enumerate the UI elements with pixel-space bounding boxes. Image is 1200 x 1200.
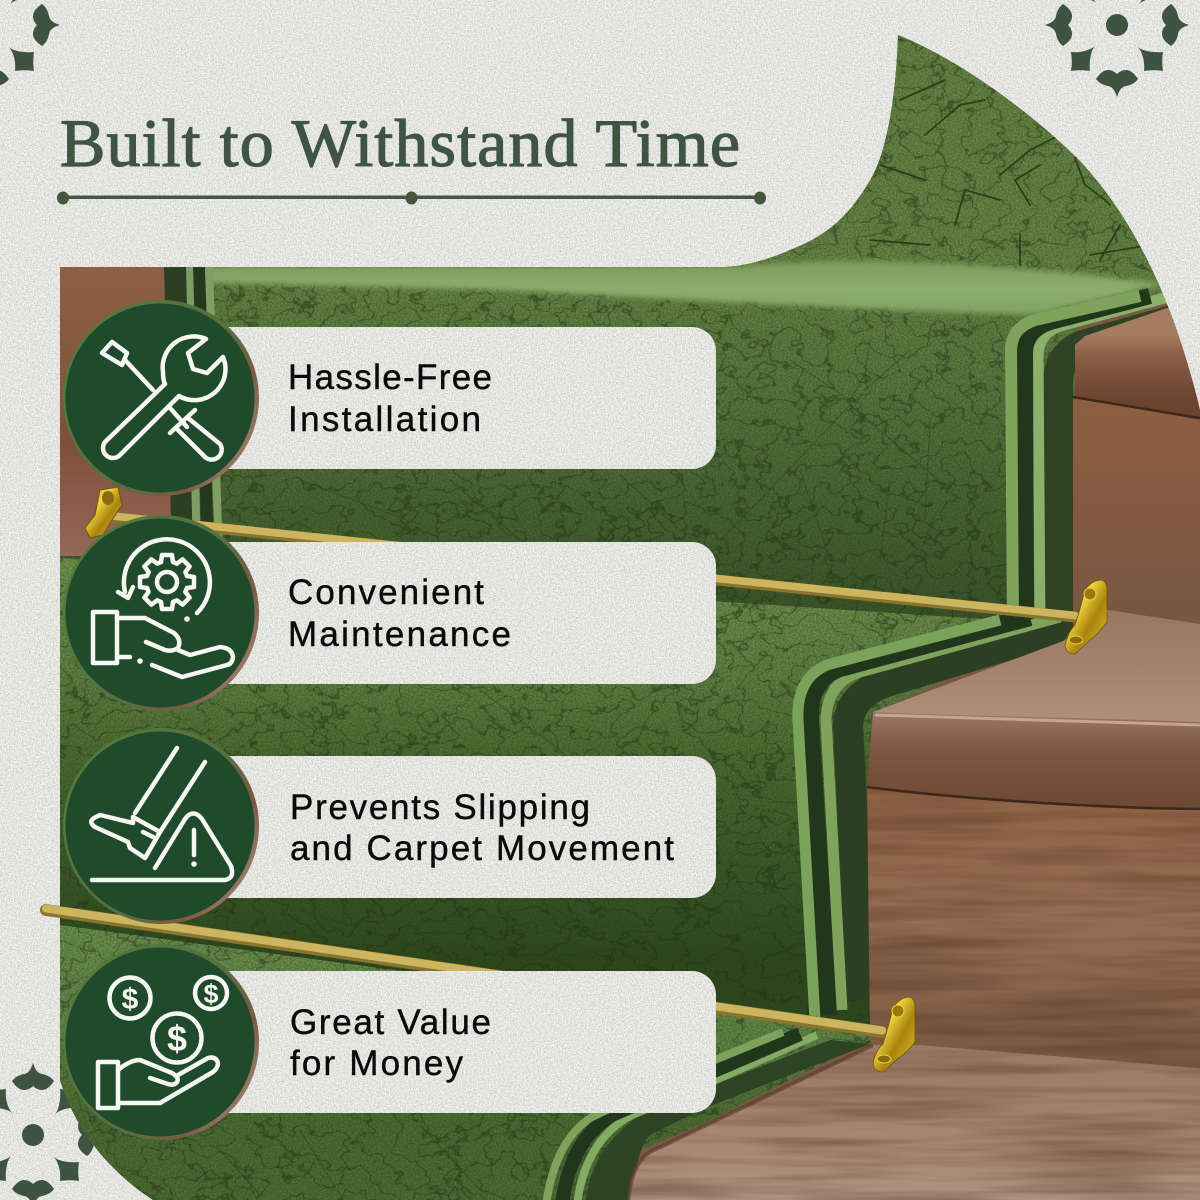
middle stripes: [798, 617, 1085, 1020]
tread edge shading: [628, 1045, 873, 1200]
nose shadow line: [867, 787, 1200, 809]
brass bracket: upper right: [1065, 580, 1107, 654]
upper tread and riser: [1073, 308, 1200, 640]
ornament: top right: [1045, 0, 1189, 97]
icon: coins over open hand: $: [167, 1018, 187, 1059]
label: Prevents Slipping and Carpet Movement: and Carpet Movement: [290, 829, 674, 868]
middle tread: [873, 610, 1200, 725]
brass bracket: lower right: [873, 997, 915, 1072]
icon: slipping foot and warning: [63, 728, 259, 924]
label: Prevents Slipping and Carpet Movement: Prevents Slipping: [290, 788, 590, 827]
lower tread: [628, 1045, 1200, 1200]
label: Hassle-Free Installation: Hassle-Free: [288, 358, 492, 397]
brass rod: upper: [108, 516, 1075, 617]
carpet highlight band: [205, 261, 1165, 315]
label panels: [150, 327, 716, 1113]
label: Convenient Maintenance: [288, 573, 511, 654]
icon: wrench and screwdriver: [63, 300, 259, 496]
icon: gear in hand: [63, 515, 259, 711]
label: Hassle-Free Installation: [288, 358, 492, 439]
title divider: [57, 192, 766, 204]
carpet veins: risers: [220, 340, 950, 1195]
icon: coins over open hand: $: [203, 979, 219, 1009]
middle carpet: [60, 558, 1075, 1045]
brass rod: lower: [46, 908, 882, 1032]
carpet cracks: top: [790, 80, 1150, 265]
icon: coins over open hand: [63, 944, 259, 1140]
middle riser: [867, 788, 1200, 1070]
upper stripes: right: [1011, 296, 1180, 628]
brass bracket: left: [85, 487, 122, 538]
middle nose: [867, 712, 1200, 812]
ornament: bottom left: [0, 1063, 105, 1200]
shadow under bracket: [1070, 590, 1110, 650]
label: Convenient Maintenance: Convenient: [288, 573, 484, 612]
label: Convenient Maintenance: Maintenance: [288, 615, 511, 654]
label: Hassle-Free Installation: Installation: [288, 400, 481, 439]
icon: coins over open hand: $: [122, 983, 139, 1016]
label: Prevents Slipping and Carpet Movement: [290, 788, 674, 868]
label: Great Value for Money: for Money: [290, 1044, 464, 1083]
left wood panel: [60, 267, 171, 556]
lower carpet stripes: [546, 1032, 870, 1200]
upper carpet: [60, 30, 1200, 626]
label: Great Value for Money: [290, 1003, 491, 1083]
lower carpet: [60, 925, 880, 1200]
title: Built to Withstand Time: [60, 105, 740, 181]
upper stripes: left: [176, 267, 219, 556]
highlight on middle nose: [875, 715, 1200, 725]
label: Great Value for Money: Great Value: [290, 1003, 491, 1042]
ornament: top left: [0, 0, 60, 97]
